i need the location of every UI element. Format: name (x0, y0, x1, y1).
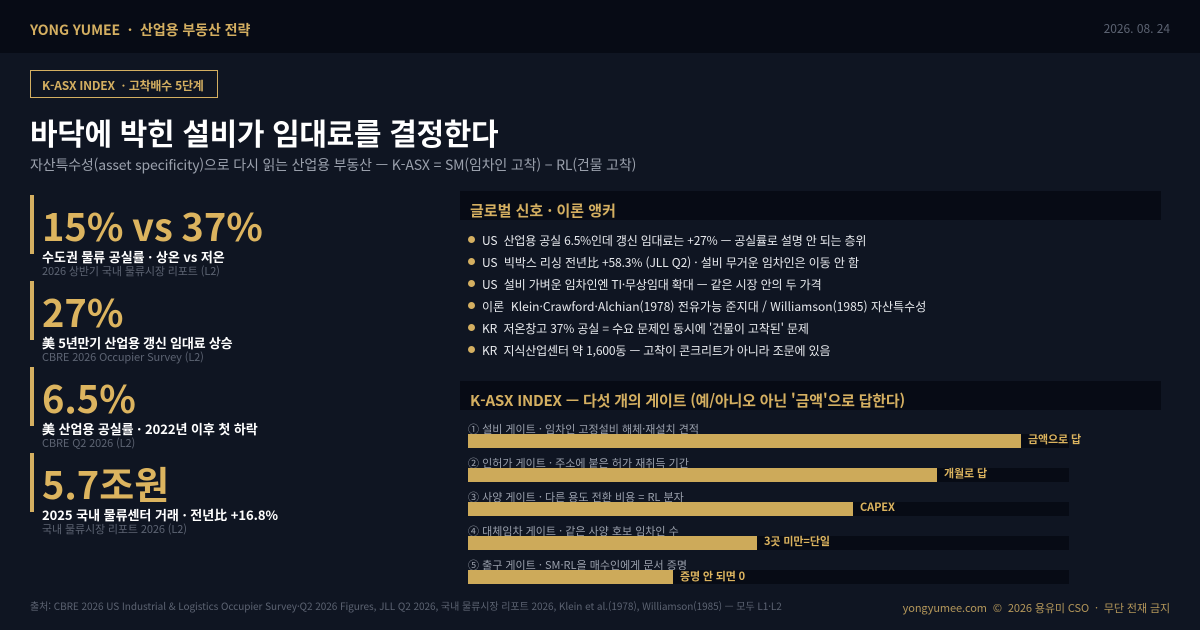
panel: key stats (30, 195, 278, 537)
stat 3 (30, 367, 258, 451)
stat 3: 美 산업용 공실률 · 2022년 이후 첫 하락 (42, 419, 258, 438)
stat 1: 수도권 물류 공실률 · 상온 vs 저온 (42, 247, 225, 266)
panel: K-ASX gates (460, 381, 1161, 584)
bar chart: 금액으로 답 (1028, 431, 1081, 447)
brand title: YONG YUMEE · 산업용 부동산 전략 (30, 20, 250, 40)
heading: global signals (460, 191, 1161, 220)
signal list (468, 232, 926, 359)
stat 4: 국내 물류시장 리포트 2026 (L2) (42, 521, 187, 537)
stat 2: 27% (42, 283, 123, 338)
stat 4: 2025 국내 물류센터 거래 · 전년比 +16.8% (42, 505, 278, 524)
bar chart: 개월로 답 (944, 465, 987, 481)
signal list: US 설비 가벼운 임차인엔 TI·무상임대 확대 — 같은 시장 안의 두 가격 (482, 276, 821, 293)
heading: gates: K-ASX INDEX — 다섯 개의 게이트 (예/아니오 아닌 '금액'으로 답한다) (470, 390, 905, 411)
bar chart: ④ 대체임차 게이트 · 같은 사양 호보 임차인 수 (468, 523, 679, 539)
stat 1: 2026 상반기 국내 물류시장 리포트 (L2) (42, 263, 220, 279)
main title: 바닥에 박힌 설비가 임대료를 결정한다 (30, 110, 498, 154)
date: 2026. 08. 24 (1104, 20, 1170, 37)
bar chart: ③ 사양 게이트 · 다른 용도 전환 비용 = RL 분자 (468, 489, 684, 505)
badge (30, 70, 218, 98)
bar chart: ① 설비 게이트 · 임차인 고정설비 해체·재설치 견적 (468, 421, 699, 437)
stat 2 (30, 281, 232, 365)
subtitle: 자산특수성(asset specificity)으로 다시 읽는 산업용 부동산 — K-ASX = SM(임차인 고착) − RL(건물 고착) (30, 155, 636, 175)
heading: global signals: 글로벌 신호 · 이론 앵커 (470, 200, 616, 221)
badge: K-ASX INDEX ㆍ고착배수 5단계 (42, 77, 204, 94)
signal list: 이론 Klein·Crawford·Alchian(1978) 전유가능 준지대 / Williamson(1985) 자산특수성 (482, 298, 926, 315)
bar chart: 3곳 미만=단일 (764, 533, 830, 549)
stat 1: 15% vs 37% (42, 197, 263, 252)
stat 4 (30, 453, 278, 537)
signal list: KR 저온창고 37% 공실 = 수요 문제인 동시에 '건물이 고착된' 문제 (482, 320, 809, 337)
source footnote: 출처: CBRE 2026 US Industrial & Logistics Occupier Survey·Q2 2026 Figures, JLL Q2 2026, 국내 물류시장 리포트 2026, Klein et al.(1978), Williamson(1985) — 모두 L1·L2 (30, 598, 782, 613)
stat 1 (30, 195, 263, 279)
copyright: yongyumee.com © 2026 용유미 CSO · 무단 전재 금지 (903, 600, 1170, 616)
signal list: US 산업용 공실 6.5%인데 갱신 임대료는 +27% — 공실률로 설명 안 되는 층위 (482, 232, 866, 249)
bar chart: ⑤ 출구 게이트 · SM·RL을 매수인에게 문서 증명 (468, 557, 687, 573)
stat 2: 美 5년만기 산업용 갱신 임대료 상승 (42, 333, 232, 352)
bar chart: CAPEX (860, 499, 895, 515)
stat 4: 5.7조원 (42, 455, 169, 510)
bar chart: ② 인허가 게이트 · 주소에 붙은 허가 재취득 기간 (468, 455, 689, 471)
panel: global signals (460, 191, 1161, 359)
heading: gates (460, 381, 1161, 410)
signal list: KR 지식산업센터 약 1,600동 — 고착이 콘크리트가 아니라 조문에 있음 (482, 342, 830, 359)
stat 3: CBRE Q2 2026 (L2) (42, 435, 135, 451)
signal list: US 빅박스 리싱 전년比 +58.3% (JLL Q2) · 설비 무거운 임차인은 이동 안 함 (482, 254, 859, 271)
stat 3: 6.5% (42, 369, 136, 424)
header bar (0, 0, 1200, 53)
stat 2: CBRE 2026 Occupier Survey (L2) (42, 349, 204, 365)
bar chart: 증명 안 되면 0 (680, 568, 745, 584)
